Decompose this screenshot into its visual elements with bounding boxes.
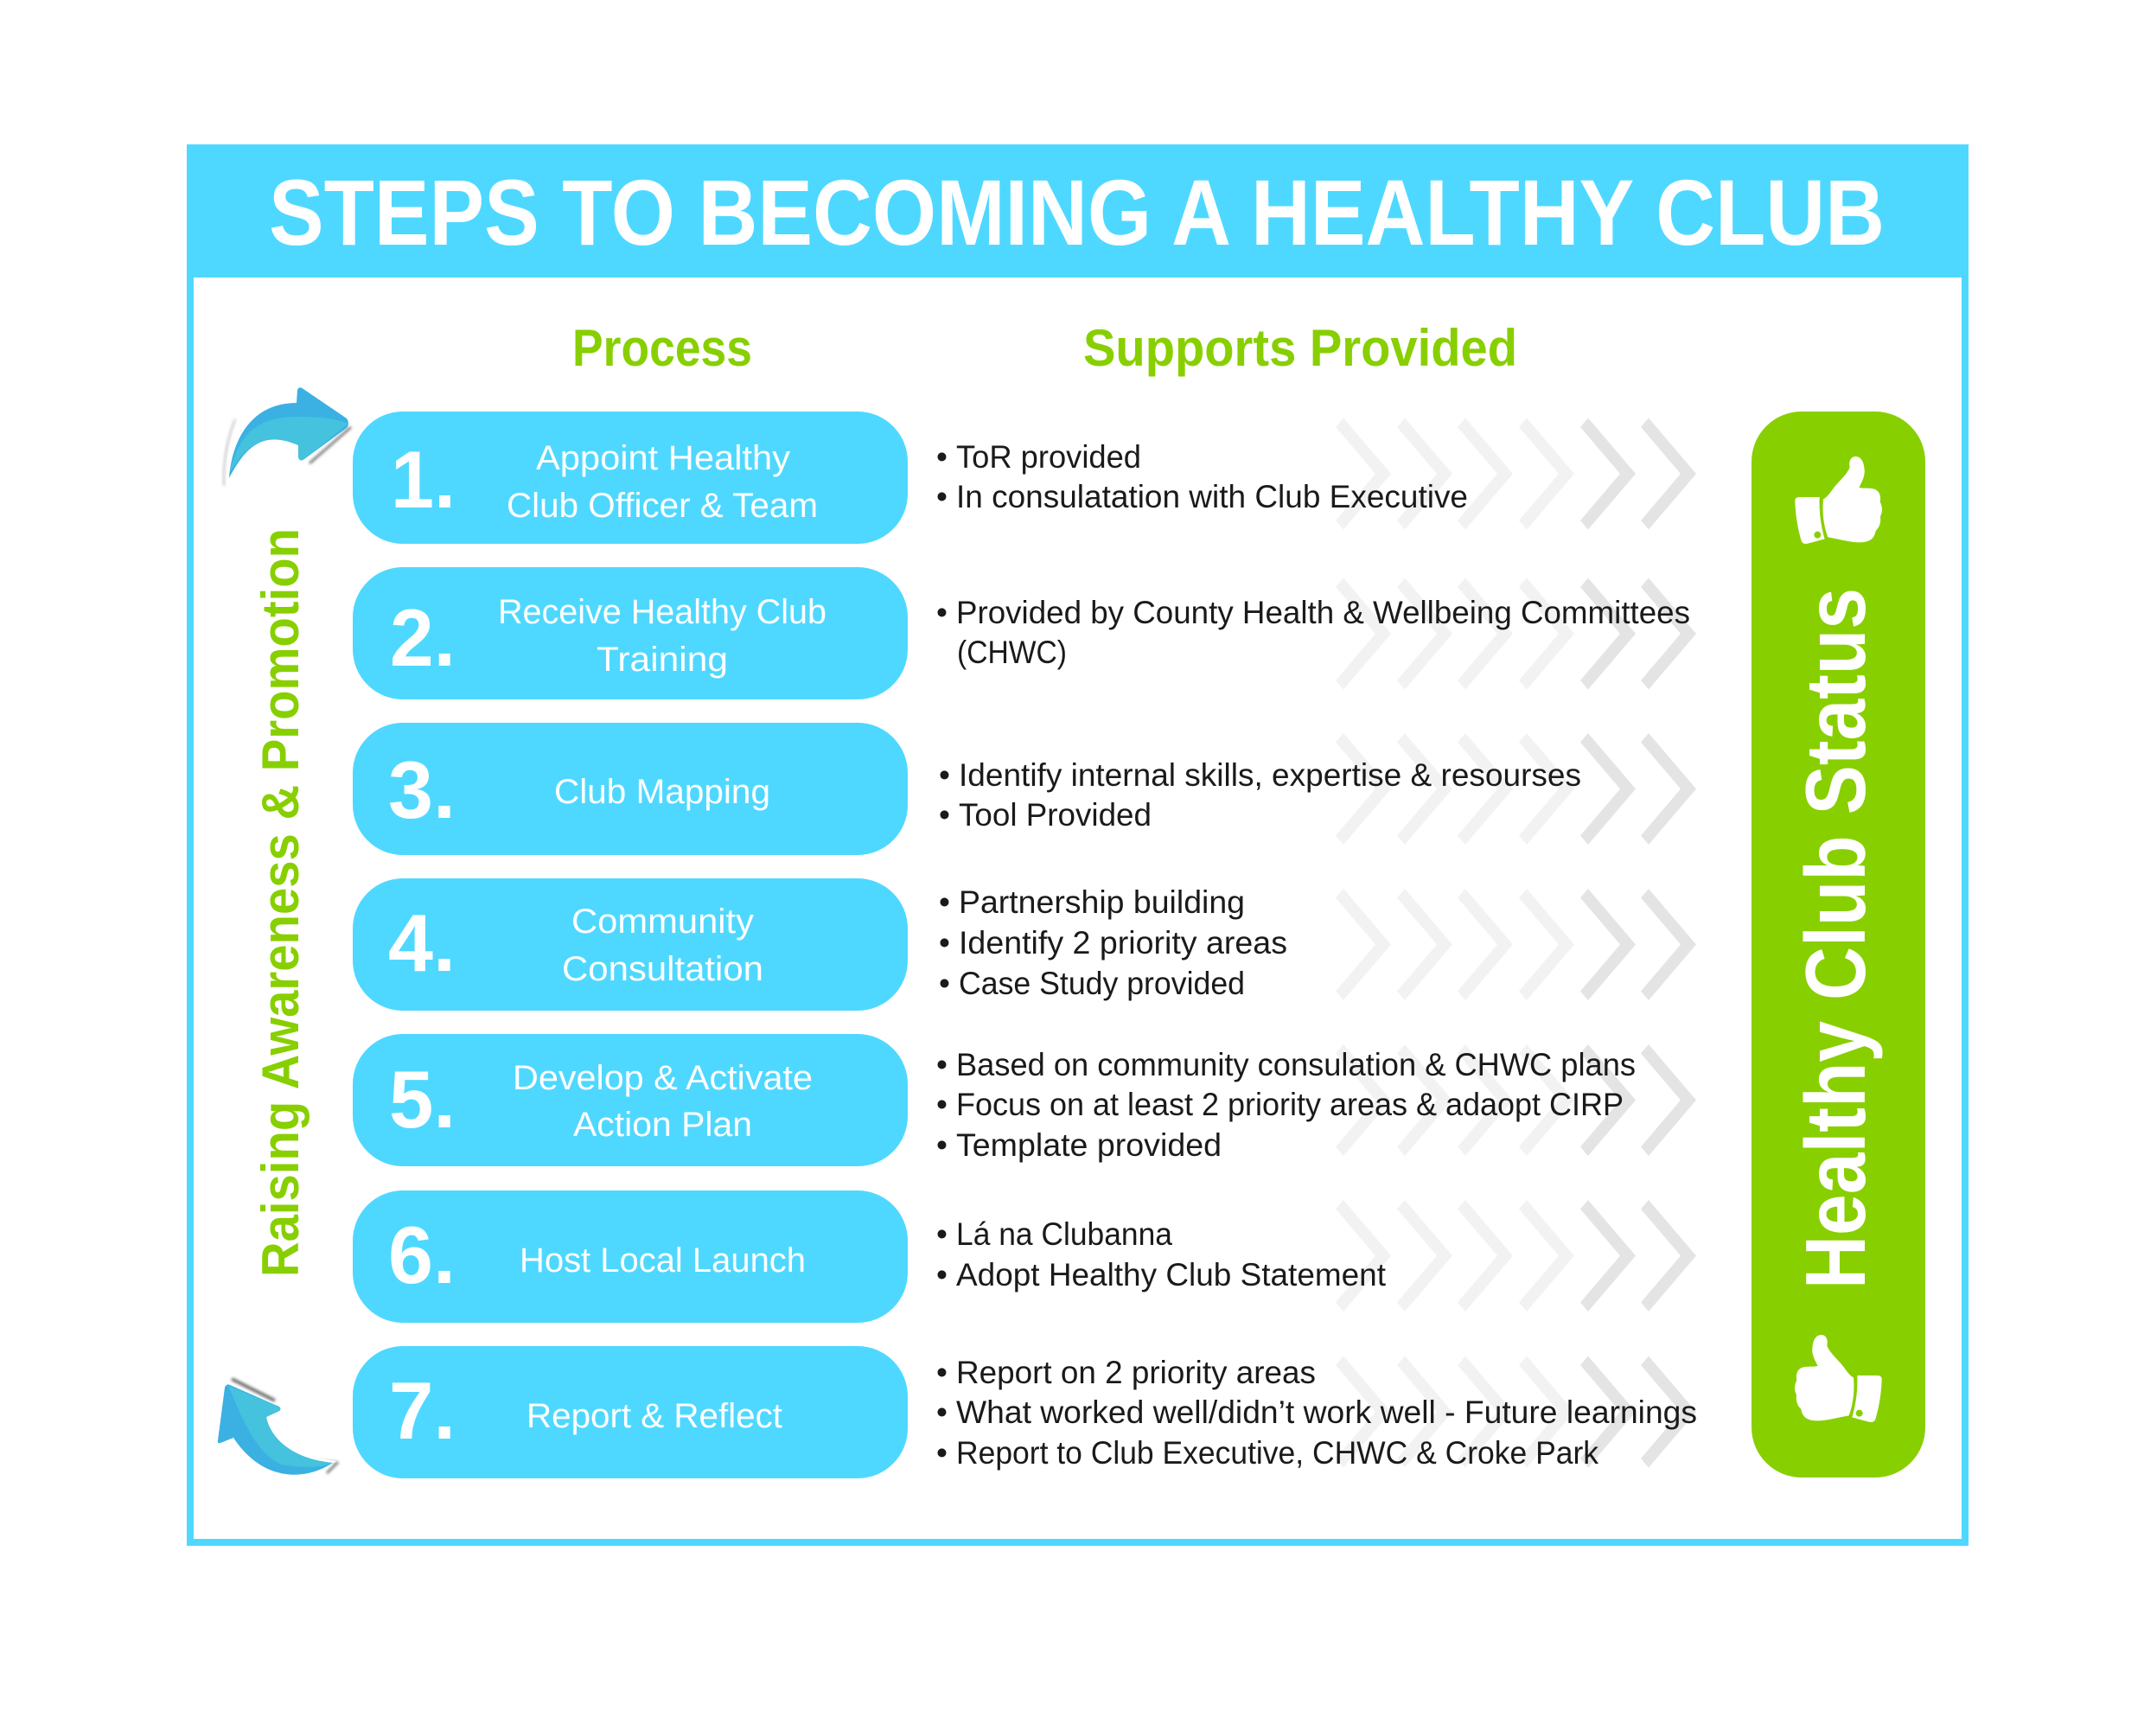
supports for step 7 (936, 1355, 1697, 1471)
supports for step 2: • (936, 595, 948, 630)
supports for step 5: Template provided (956, 1127, 1222, 1163)
supports for step 6: Adopt Healthy Club Statement (956, 1257, 1387, 1292)
step 6 (353, 1190, 908, 1323)
title: STEPS TO BECOMING A HEALTHY CLUB (269, 160, 1885, 265)
supports for step 4: • (939, 884, 950, 920)
supports for step 5: Based on community consulation & CHWC plans (956, 1047, 1636, 1082)
side label: Raising Awareness & Promotion: Raising Awareness & Promotion (252, 528, 309, 1277)
step 1: Appoint Healthy (536, 439, 790, 477)
supports for step 7: • (936, 1355, 948, 1390)
supports for step 5: • (936, 1087, 948, 1122)
heading: Process: Process (572, 319, 752, 377)
supports for step 2: (CHWC) (957, 635, 1067, 670)
supports for step 2: Provided by County Health & Wellbeing Committees (956, 595, 1690, 630)
step 2: Receive Healthy Club (498, 593, 826, 631)
supports for step 4 (939, 884, 1287, 1001)
step 1 (353, 412, 908, 544)
step 4: 4. (388, 897, 456, 988)
supports for step 3: • (939, 757, 950, 793)
supports for step 5: • (936, 1047, 948, 1082)
status label: Healthy Club Status (1788, 588, 1883, 1289)
step 7: Report & Reflect (526, 1397, 782, 1435)
step 6: 6. (388, 1209, 456, 1300)
supports for step 7: What worked well/didn’t work well - Future learnings (956, 1395, 1697, 1430)
supports for step 5: • (936, 1127, 948, 1163)
supports for step 3: Tool Provided (959, 797, 1152, 833)
supports for step 5: Focus on at least 2 priority areas & adaopt CIRP (956, 1087, 1624, 1122)
supports for step 4: Partnership building (959, 884, 1245, 920)
supports for step 1 (936, 439, 1468, 514)
supports for step 1: In consulatation with Club Executive (956, 479, 1468, 514)
step 7: 7. (389, 1365, 456, 1456)
supports for step 4: • (939, 966, 950, 1001)
supports for step 4: Case Study provided (959, 966, 1245, 1001)
supports for step 3: Identify internal skills, expertise & resourses (959, 757, 1581, 793)
supports for step 4: Identify 2 priority areas (959, 925, 1287, 961)
step 5: 5. (389, 1054, 456, 1145)
panel: Healthy Club Status (1752, 412, 1925, 1478)
step 6: Host Local Launch (520, 1241, 806, 1280)
supports for step 1: • (936, 439, 948, 475)
supports for step 3: • (939, 797, 950, 833)
step 4: Consultation (562, 950, 763, 988)
supports for step 7: Report to Club Executive, CHWC & Croke Park (956, 1435, 1598, 1471)
supports for step 6: • (936, 1257, 948, 1292)
step 2: 2. (390, 592, 456, 683)
panel: main frame (190, 148, 1965, 1542)
step 3: Club Mapping (554, 773, 770, 811)
supports for step 7: • (936, 1395, 948, 1430)
arrow: bottom curved arrow pointing up-left (215, 1379, 338, 1476)
header band with title (187, 144, 1969, 278)
step 1: Club Officer & Team (507, 487, 818, 525)
supports for step 3 (939, 757, 1581, 833)
step 5: Action Plan (573, 1106, 752, 1144)
step 3 (353, 723, 908, 855)
step 4: Community (571, 903, 754, 941)
chevron background rows (1336, 418, 1696, 1468)
step 2: Training (597, 641, 728, 679)
icon: bottom thumbs up (1795, 1335, 1882, 1422)
step 1: 1. (391, 434, 456, 525)
step 4 (353, 878, 908, 1011)
arrow: top curved arrow pointing right (224, 386, 352, 486)
supports for step 6 (936, 1216, 1387, 1292)
supports for step 4: • (939, 925, 950, 961)
supports for step 2 (936, 595, 1690, 670)
heading: Supports Provided: Supports Provided (1083, 319, 1517, 377)
supports for step 7: • (936, 1435, 948, 1471)
supports for step 6: • (936, 1216, 948, 1252)
supports for step 1: ToR provided (956, 439, 1141, 475)
supports for step 7: Report on 2 priority areas (956, 1355, 1316, 1390)
supports for step 6: Lá na Clubanna (956, 1216, 1172, 1252)
step 5 (353, 1034, 908, 1166)
supports for step 1: • (936, 479, 948, 514)
step 2 (353, 567, 908, 699)
supports for step 5 (936, 1047, 1636, 1163)
icon: top thumbs up (1795, 456, 1882, 544)
step 3: 3. (388, 744, 456, 835)
step 5: Develop & Activate (513, 1059, 813, 1097)
step 7 (353, 1346, 908, 1478)
